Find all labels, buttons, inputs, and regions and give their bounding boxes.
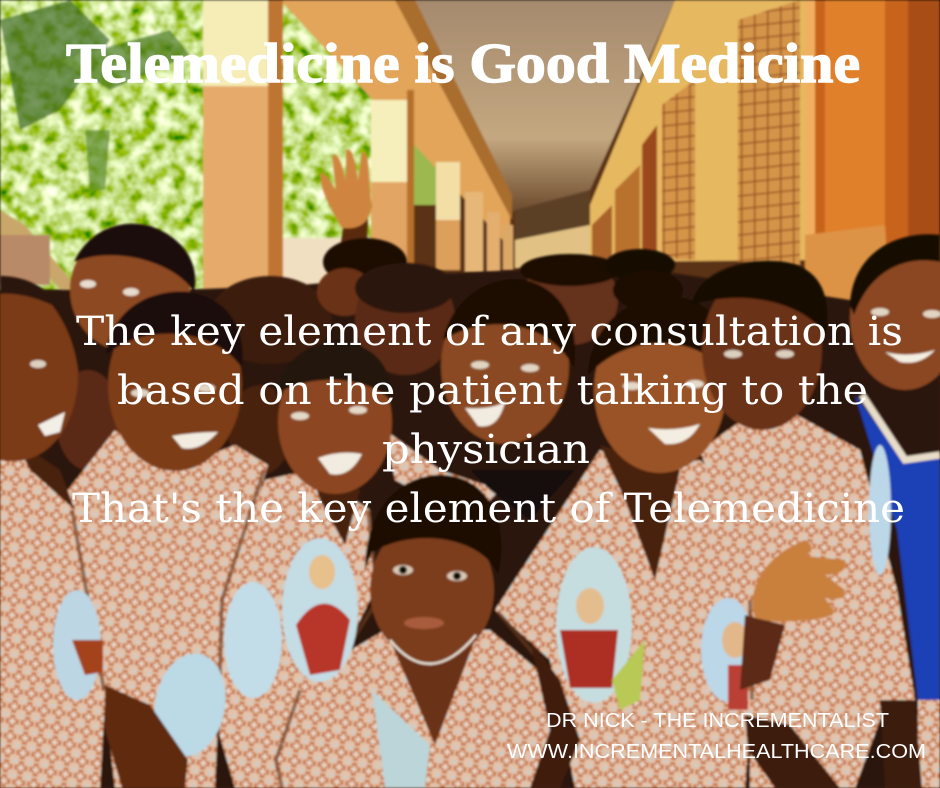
arms and hands <box>105 540 922 788</box>
long beam <box>280 0 510 248</box>
foliage left <box>0 0 210 290</box>
shirts <box>0 400 940 788</box>
background heads <box>56 238 683 475</box>
child: raised hand <box>320 149 372 275</box>
right wall <box>590 0 810 262</box>
author credit: DR NICK - THE INCREMENTALIST <box>546 710 889 732</box>
child faces <box>0 224 940 788</box>
pillar 1 <box>203 0 268 88</box>
quote text: That's the key element of Telemedicine <box>72 486 905 532</box>
blue shirt <box>855 395 940 700</box>
quote text: physician <box>382 427 590 473</box>
title: Telemedicine is Good Medicine <box>66 33 860 95</box>
doors <box>805 0 940 300</box>
author credit <box>507 710 926 763</box>
face: far-left child <box>0 276 78 461</box>
pillar 2 <box>371 100 407 182</box>
ceiling <box>400 0 675 212</box>
dark leaves <box>0 0 190 190</box>
face: little girl in front <box>365 475 501 788</box>
background dark mass <box>0 260 940 788</box>
face: top-left child <box>70 224 195 352</box>
wall lattices <box>738 0 800 265</box>
quote text: The key element of any consultation is <box>76 309 903 355</box>
quote text: based on the patient talking to the <box>117 368 868 414</box>
quote text <box>72 309 905 532</box>
face: front-right child <box>588 297 729 473</box>
further pillars <box>436 162 460 222</box>
face: back-right child <box>692 261 827 430</box>
face: centre child <box>441 279 575 444</box>
author credit: WWW.INCREMENTALHEALTHCARE.COM <box>507 741 926 763</box>
face: second child <box>106 292 243 471</box>
foliage centre <box>280 0 375 250</box>
face: far-right child <box>850 234 940 390</box>
badges on shirts <box>53 445 891 762</box>
neck areas <box>15 440 680 745</box>
shirt fold shadows <box>72 470 752 788</box>
tree branch <box>0 210 75 295</box>
face: third child <box>275 342 392 494</box>
